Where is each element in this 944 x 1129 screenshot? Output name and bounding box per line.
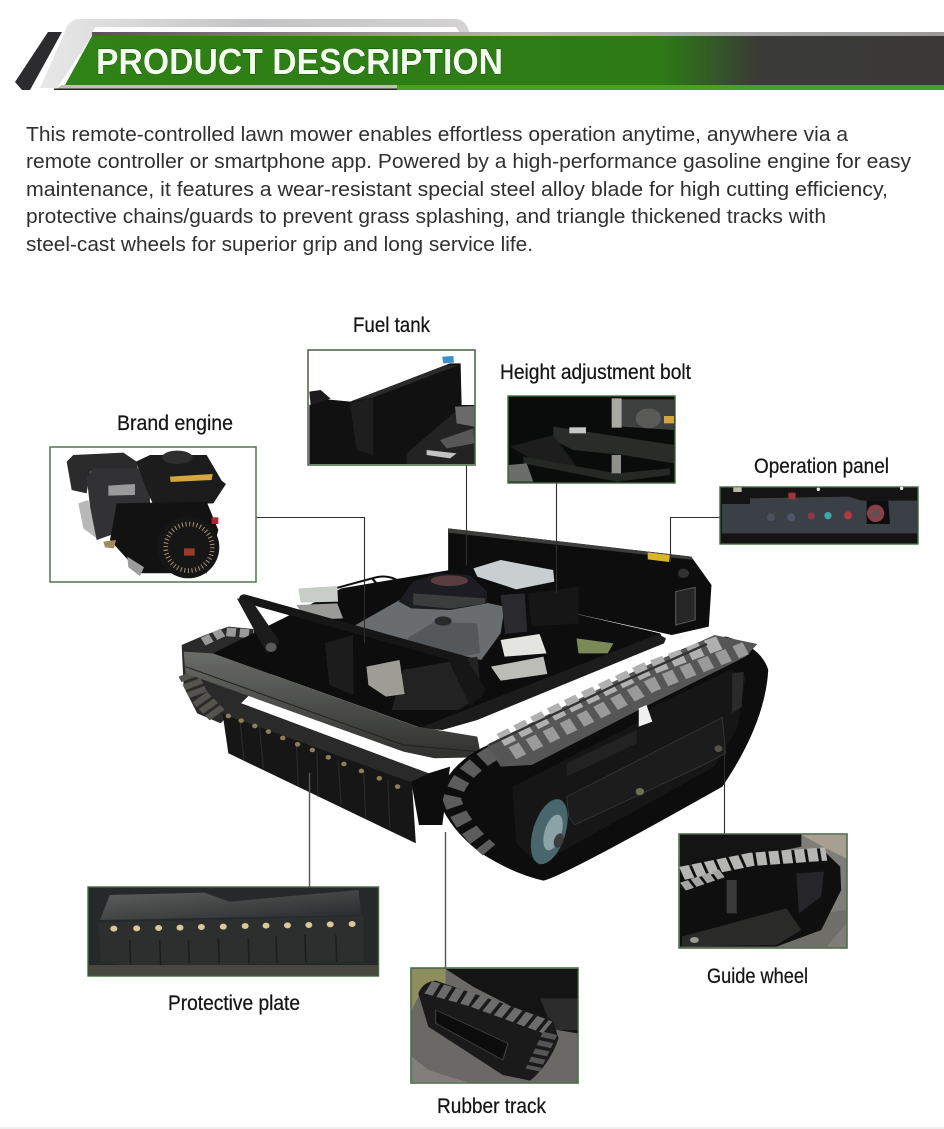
label: guide wheel: Guide wheel <box>707 965 808 988</box>
guide wheel <box>524 796 575 867</box>
panel: rubber track <box>411 968 578 1083</box>
band bottom strip <box>54 85 397 90</box>
description text: protective chains/guards to prevent grass splashing, and triangle thickened tracks with <box>26 206 826 228</box>
grass gap <box>577 638 613 653</box>
description text <box>26 124 911 256</box>
label: protective plate: Protective plate <box>168 992 300 1015</box>
dark left bracket <box>15 32 62 90</box>
band top edge <box>92 32 944 36</box>
right track <box>438 635 768 881</box>
radiator block <box>528 587 578 627</box>
label: brand engine: Brand engine <box>117 412 233 435</box>
label: rubber track: Rubber track <box>437 1095 546 1118</box>
panel: height adjustment bolt <box>508 396 675 483</box>
gearbox <box>473 560 554 589</box>
engine body <box>353 600 505 660</box>
band bottom dark line <box>54 88 397 90</box>
left track behind <box>182 620 326 723</box>
frame floor <box>213 570 664 730</box>
bolts <box>636 788 644 795</box>
rear panel <box>448 528 711 635</box>
description text: This remote-controlled lawn mower enables effortless operation anytime, anywhere via a <box>26 124 849 146</box>
side plate <box>567 717 725 825</box>
label: height adjustment bolt: Height adjustment bolt <box>500 361 691 384</box>
panel: fuel tank <box>308 350 475 465</box>
front frame rail <box>184 652 481 758</box>
track lugs end <box>452 753 493 850</box>
bottom page edge <box>0 1127 944 1129</box>
engine lower <box>392 657 481 710</box>
panel: protective plate <box>88 887 379 976</box>
air filter <box>366 660 405 697</box>
panel: brand engine <box>50 447 256 582</box>
header banner <box>15 19 944 90</box>
black guard <box>325 635 354 695</box>
left actuator <box>296 586 343 620</box>
label: operation panel: Operation panel <box>754 455 889 478</box>
protective plate <box>223 701 429 843</box>
description text: remote controller or smartphone app. Powered by a high-performance gasoline engine for easy <box>26 151 911 173</box>
panel: guide wheel <box>679 834 847 948</box>
label: fuel tank: Fuel tank <box>353 314 430 337</box>
right actuator <box>491 634 547 681</box>
end plate <box>732 672 744 713</box>
track lugs top <box>501 642 722 740</box>
white inner tab <box>92 27 460 33</box>
green band <box>65 36 944 85</box>
track band <box>487 635 757 767</box>
description text: steel-cast wheels for superior grip and long service life. <box>26 234 533 256</box>
silver tab <box>40 19 470 88</box>
track inner frame <box>512 670 746 867</box>
control cable <box>335 576 400 590</box>
oil cylinder <box>501 593 527 634</box>
title: PRODUCT DESCRIPTION <box>96 41 503 82</box>
right frame rail <box>419 634 666 730</box>
recoil cover <box>399 573 487 610</box>
mower illustration <box>182 528 768 881</box>
light gap <box>639 705 652 727</box>
connector lines <box>256 465 724 968</box>
description text: maintenance, it features a wear-resistant special steel alloy blade for high cutting efficiency, <box>26 179 888 201</box>
band bright green strip <box>397 85 944 90</box>
panel: operation panel <box>720 487 918 544</box>
engine fuel tank <box>407 622 480 658</box>
front cross shadow <box>411 767 450 825</box>
push bar <box>237 598 486 707</box>
